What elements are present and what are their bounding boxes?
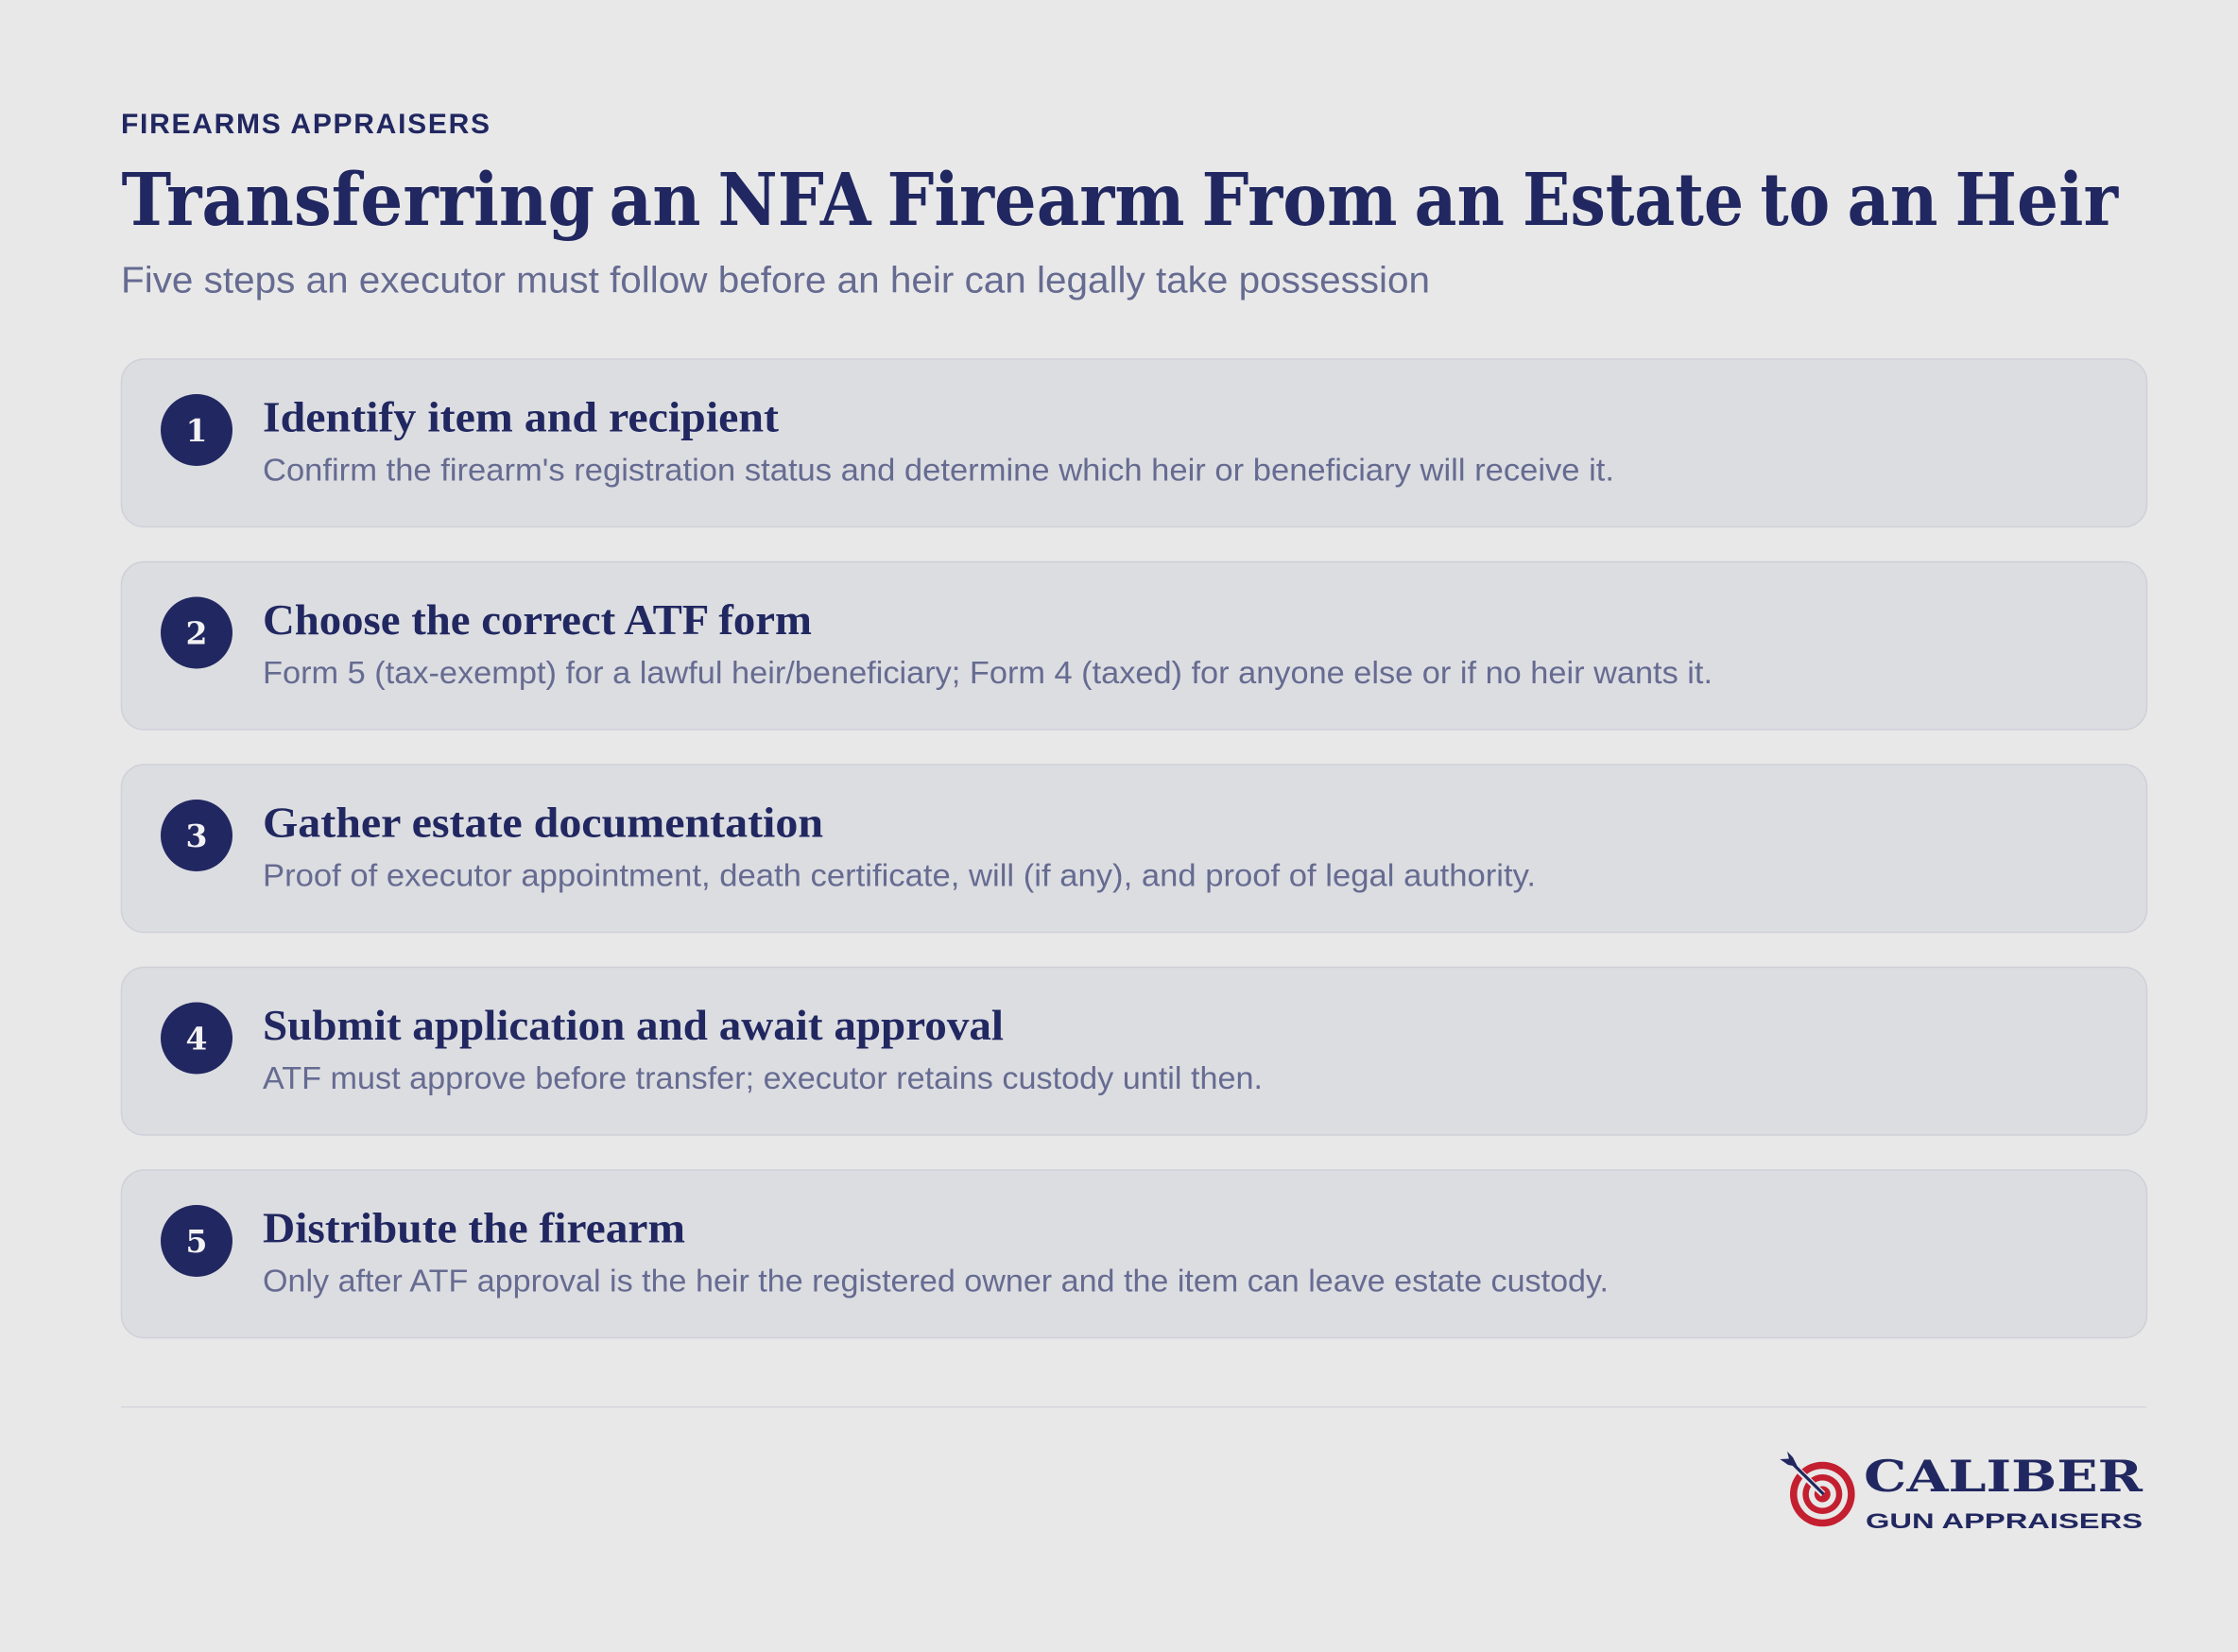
step 1 heading: Identify item and recipient xyxy=(263,393,780,440)
number badge 4: 4 xyxy=(186,1021,207,1057)
title: Firearm xyxy=(887,158,1185,243)
title: NFA xyxy=(718,158,872,243)
subtitle: Five steps an executor must follow before an heir can legally take possession xyxy=(121,261,1430,301)
step 4 heading: Submit application and await approval xyxy=(263,1001,1004,1049)
number badge 3 xyxy=(161,800,232,871)
step 5 description: Only after ATF approval is the heir the registered owner and the item can leave estate custody. xyxy=(263,1265,1609,1299)
panel: step 4 xyxy=(121,968,2147,1135)
step 3 heading: Gather estate documentation xyxy=(263,798,823,847)
number badge 5: 5 xyxy=(186,1223,207,1260)
number badge 1: 1 xyxy=(186,412,207,449)
number badge 2: 2 xyxy=(186,614,207,652)
title: an xyxy=(609,158,701,243)
title: an xyxy=(1847,158,1937,243)
icon: target with arrow xyxy=(1780,1452,1855,1526)
title: Transferring xyxy=(121,158,594,243)
step 5 heading: Distribute the firearm xyxy=(263,1204,685,1251)
logo wordmark: CALIBER xyxy=(1864,1451,2143,1502)
number badge 4 xyxy=(161,1002,232,1074)
logo tagline: GUN APPRAISERS xyxy=(1866,1509,2143,1533)
eyebrow label: FIREARMS APPRAISERS xyxy=(121,109,490,140)
step 2 heading: Choose the correct ATF form xyxy=(263,595,812,644)
title xyxy=(121,158,2119,243)
title: to xyxy=(1760,158,1830,243)
step 2 description: Form 5 (tax-exempt) for a lawful heir/beneficiary; Form 4 (taxed) for anyone else or if no heir wants it. xyxy=(263,656,1713,691)
step 3 description: Proof of executor appointment, death certificate, will (if any), and proof of legal authority. xyxy=(263,858,1536,894)
logo: Caliber Gun Appraisers xyxy=(1780,1451,2143,1533)
number badge 1 xyxy=(161,394,232,466)
panel: step 5 xyxy=(121,1170,2147,1338)
panel: step 3 xyxy=(121,765,2147,932)
title: Estate xyxy=(1523,158,1744,243)
step 1 description: Confirm the firearm's registration status and determine which heir or beneficiary will receive it. xyxy=(263,454,1614,488)
step 4 description: ATF must approve before transfer; executor retains custody until then. xyxy=(263,1061,1263,1096)
title: From xyxy=(1202,158,1397,243)
title: Heir xyxy=(1954,158,2119,243)
header xyxy=(121,109,2119,301)
panel: step 2 xyxy=(121,561,2147,730)
title: an xyxy=(1414,158,1505,243)
number badge 3: 3 xyxy=(186,817,207,854)
number badge 5 xyxy=(161,1205,232,1277)
panel: step 1 xyxy=(121,359,2147,527)
number badge 2 xyxy=(161,597,232,669)
